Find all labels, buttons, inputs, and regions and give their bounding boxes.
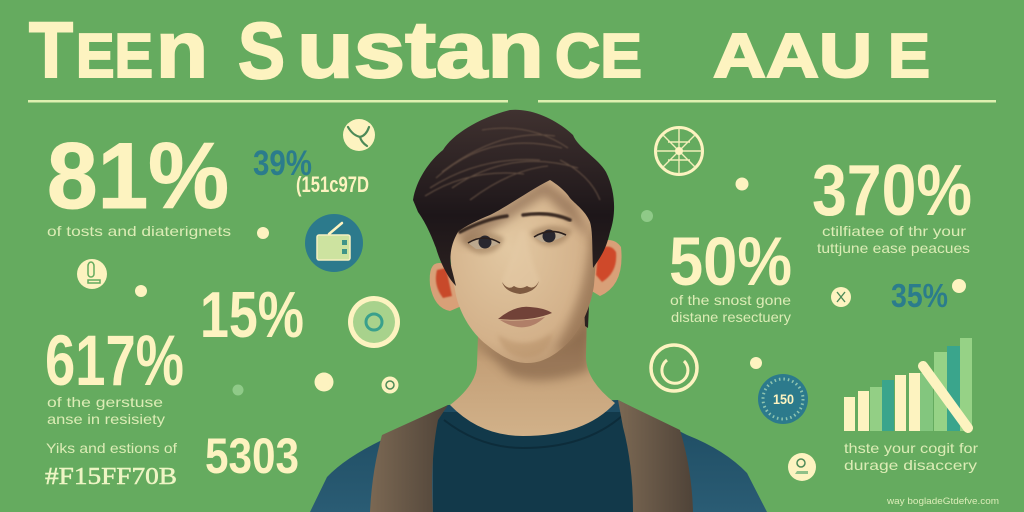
stat: 617%: anse in resisiety (47, 411, 165, 427)
icon: smile ring (651, 345, 697, 391)
backpack strap left (370, 405, 448, 512)
stat: 617% (45, 322, 184, 427)
ear right (590, 240, 622, 296)
stat: 617%: of the gerstuse (47, 394, 163, 410)
ear left (430, 263, 464, 311)
stat: 50%: 50% (669, 223, 792, 300)
stat: 50%: distane resectuery (671, 309, 791, 325)
backpack strap right (618, 400, 693, 512)
eye left (468, 236, 500, 249)
bar chart caption: thste your cogit for (844, 440, 978, 456)
shirt front (433, 412, 633, 512)
stat: 35%: 35% (891, 277, 948, 314)
bar chart caption (844, 440, 978, 473)
face (450, 180, 596, 363)
icon: person badge (788, 453, 816, 481)
icon: person (77, 259, 107, 289)
stat: 39%: 39% (253, 144, 312, 183)
icon: wheel (656, 128, 702, 174)
stat: 370%: tuttjune ease peacues (817, 240, 970, 256)
bar chart (844, 338, 972, 431)
icon: x badge (831, 287, 851, 307)
stat: 39%: (151c97D (296, 172, 369, 197)
icon: target (348, 296, 400, 348)
stat: colour code: #F15FF70B (45, 464, 177, 490)
stat: 39% (253, 144, 369, 197)
decorative dots (135, 178, 966, 396)
icon: 150 gauge (758, 374, 808, 424)
title: CE (555, 22, 642, 91)
nose (502, 230, 540, 294)
neck (450, 317, 615, 436)
stat: 15%: 15% (200, 278, 304, 351)
stat: 370% (812, 151, 972, 256)
shirt (310, 400, 767, 512)
stat: colour code (45, 440, 177, 490)
stat: 370%: 370% (812, 151, 972, 231)
portrait: teen with backpack (310, 110, 767, 512)
title: ustan (297, 5, 544, 94)
stat: 81%: of tosts and diaterignets (47, 223, 231, 239)
eyebrow left (460, 216, 507, 232)
stat: 617%: 617% (45, 322, 184, 401)
title: n (156, 5, 208, 94)
stat: 50% (669, 223, 792, 325)
website footer: way bogladeGtdefve.com (886, 496, 999, 506)
mouth (498, 307, 552, 327)
shirt collar line (444, 416, 622, 448)
title: E (888, 22, 930, 91)
stat: 81%: 81% (47, 123, 229, 228)
eye right (534, 230, 566, 242)
eyebrow right (523, 214, 570, 220)
stat: 50%: of the snost gone (670, 292, 791, 308)
stat: colour code: Yiks and estions of (46, 440, 177, 456)
eye socket shadows (462, 225, 572, 254)
stat: 370%: ctilfiatee of thr your (822, 223, 966, 239)
title: AAU (713, 22, 872, 91)
title: S (238, 6, 285, 95)
hair (413, 110, 614, 286)
stat: 5303: 5303 (205, 428, 299, 484)
title: T (29, 5, 73, 94)
title: EE (76, 22, 153, 91)
icon: clock hands (343, 119, 375, 151)
hair highlights (425, 128, 600, 200)
bar chart caption: durage disaccery (844, 457, 977, 473)
icon: tv (305, 214, 363, 272)
icon: small at symbol (382, 376, 398, 394)
hair strand behind jaw (584, 305, 589, 328)
icon: 150 gauge: 150 (773, 391, 794, 407)
title (29, 5, 930, 95)
